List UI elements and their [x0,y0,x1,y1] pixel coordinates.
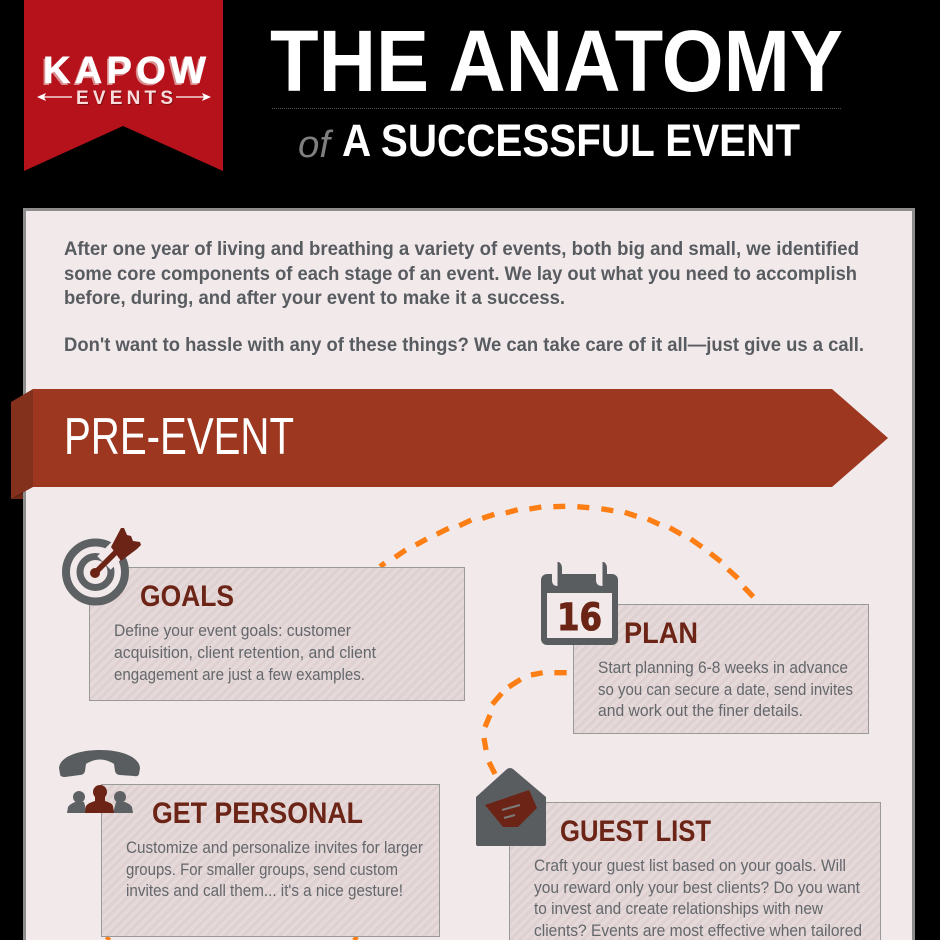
main panel [24,210,914,940]
icon: calendar [541,562,618,645]
icon: envelope [476,768,546,846]
text: plan: and work out the finer details. [598,702,803,720]
logo ribbon [24,0,223,171]
intro text [64,238,864,356]
panel: guest list [510,802,880,940]
intro text: After one year of living and breathing a variety of events, both big and small, we identified [64,238,859,260]
arrow: goals to plan [380,506,753,597]
heading: plan: PLAN [624,617,698,650]
text: get personal: invites and call them... it's a nice gesture! [126,882,403,900]
banner: pre-event [11,389,888,499]
title: of [298,124,333,166]
text: plan: so you can secure a date, send invites [598,681,853,699]
icon: target [62,528,141,605]
panel: goals [90,568,464,700]
icon: calendar: 16 [557,596,602,639]
panel: get personal [102,784,440,936]
text: goals: Define your event goals: customer [114,622,351,640]
text: plan: Start planning 6-8 weeks in advance [598,659,848,677]
heading: goals: GOALS [140,580,234,613]
arrow stubs below get personal [107,937,357,940]
text: get personal: groups. For smaller groups, send custom [126,861,398,879]
text: guest list: Craft your guest list based on your goals. Will [534,857,846,875]
title: A SUCCESSFUL EVENT [342,115,800,166]
logo ribbon: KAPOW [41,52,204,94]
intro text: Don't want to hassle with any of these things? We can take care of it all—just give us a call. [64,334,864,356]
intro text: some core components of each stage of an event. We lay out what you need to accomplish [64,263,857,285]
title: THE ANATOMY [270,13,843,110]
logo ribbon: EVENTS [76,88,173,109]
text: get personal: Customize and personalize invites for larger [126,839,423,857]
text: guest list: you reward only your best clients? Do you want [534,879,860,897]
arrow: plan to guest list [484,673,567,774]
heading: guest list: GUEST LIST [560,815,711,848]
text: guest list: to invest and create relationships with new [534,900,823,918]
text: guest list: clients? Events are most effective when tailored [534,922,862,940]
panel: plan [574,604,868,734]
text: plan [598,659,853,720]
intro text: before, during, and after your event to make it a success. [64,287,565,309]
text: goals: engagement are just a few examples. [114,666,365,684]
text: get personal [126,839,423,900]
logo ribbon: KAPOW [43,50,206,92]
icon: phone and people [59,750,140,813]
heading: get personal: GET PERSONAL [152,797,363,830]
text: goals: acquisition, client retention, and client [114,644,376,662]
text: goals [114,622,376,684]
title [270,13,843,166]
banner: pre-event: PRE-EVENT [64,408,294,466]
text: guest list [534,857,862,940]
logo ribbon: EVENTS [77,89,174,110]
